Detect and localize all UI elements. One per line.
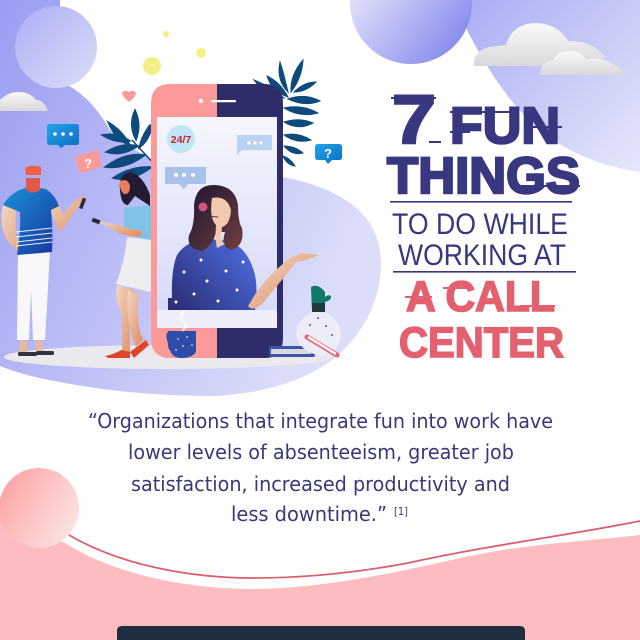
cloud: left bbox=[0, 92, 48, 111]
chat bubble: blue question: ? bbox=[324, 146, 332, 161]
wave line bbox=[69, 521, 640, 578]
desk on screen bbox=[157, 310, 277, 328]
title: to do while: TO DO WHILE bbox=[392, 208, 568, 241]
man bbox=[1, 166, 86, 356]
chat bubble: blue bbox=[47, 124, 79, 148]
woman: legs bbox=[116, 285, 135, 352]
plant: right leaves bbox=[254, 60, 320, 166]
decorative dots bbox=[143, 31, 206, 75]
chat bubble: screen right bbox=[237, 135, 272, 155]
man: neck and beard bbox=[26, 178, 40, 192]
ground shadow bbox=[4, 345, 332, 369]
title: pink glitch marks bbox=[405, 288, 555, 306]
woman: top bbox=[124, 205, 151, 240]
title: a call: A CALL bbox=[406, 273, 555, 321]
circle: top centre bbox=[350, 0, 472, 64]
quote: [1] bbox=[394, 505, 408, 518]
woman: face bbox=[120, 180, 130, 194]
man: shirt bbox=[3, 187, 59, 255]
title: 7 FUN: 7 bbox=[392, 81, 436, 158]
chat bubble: pink question bbox=[75, 150, 102, 172]
woman: hair bbox=[120, 172, 150, 206]
agent: headset bbox=[198, 202, 218, 217]
chat bubble: screen left bbox=[165, 167, 206, 189]
circle: top left bbox=[15, 6, 97, 88]
title: 7 FUN: FUN bbox=[450, 97, 560, 154]
title: rule 1 bbox=[390, 201, 572, 203]
title: rule 2 bbox=[393, 271, 576, 273]
badge: 24/7 bbox=[167, 125, 195, 153]
badge: 24/7: 24/7 bbox=[171, 134, 191, 146]
woman: arm bbox=[95, 221, 143, 236]
phone: screen bbox=[157, 117, 277, 328]
title: working at: WORKING AT bbox=[398, 239, 566, 272]
pink wave bottom bbox=[0, 516, 640, 640]
title: 7 FUN bbox=[392, 81, 560, 158]
cloud: front bbox=[540, 51, 625, 75]
agent: sweater bbox=[168, 239, 256, 310]
books and cactus vase bbox=[269, 286, 341, 357]
chat bubble: blue question bbox=[315, 144, 342, 164]
cloud: back bbox=[474, 23, 606, 66]
icon: heart bbox=[122, 91, 136, 102]
agent: hair bbox=[189, 185, 243, 251]
quote: less downtime.” bbox=[231, 502, 387, 526]
cloud: top right bbox=[474, 23, 625, 75]
quote: “Organizations that integrate fun into work have bbox=[88, 409, 553, 433]
quote: satisfaction, increased productivity and bbox=[131, 472, 510, 496]
title: glitch marks bbox=[387, 98, 580, 186]
background: lavender top-left wave bbox=[0, 0, 381, 396]
agent: sweater dots bbox=[174, 258, 244, 304]
circle: bottom left pink bbox=[0, 468, 79, 548]
agent woman bbox=[168, 185, 318, 310]
man: feet bbox=[18, 341, 54, 356]
man: shirt stripes bbox=[16, 228, 52, 246]
man: hair bbox=[25, 166, 41, 175]
dark panel bottom bbox=[117, 626, 525, 640]
woman: skirt bbox=[116, 237, 151, 292]
phone: pink half bbox=[151, 84, 217, 358]
chat bubble: pink question: ? bbox=[84, 156, 92, 171]
phone bbox=[151, 84, 283, 358]
man: phone bbox=[79, 198, 86, 209]
man: trousers bbox=[17, 249, 50, 340]
title bbox=[387, 81, 580, 367]
agent: face bbox=[211, 198, 231, 248]
title: THINGS: THINGS bbox=[387, 147, 580, 204]
phone: navy half bbox=[217, 84, 283, 358]
background: lavender top-right shape bbox=[465, 0, 640, 172]
woman: phone bbox=[92, 218, 100, 224]
woman bbox=[92, 172, 151, 358]
phone: speaker bbox=[199, 99, 236, 103]
woman: shoes bbox=[105, 340, 149, 358]
quote bbox=[88, 409, 553, 526]
quote: lower levels of absenteeism, greater job bbox=[128, 440, 514, 464]
title: center: CENTER bbox=[399, 319, 564, 367]
agent: arm bbox=[248, 253, 318, 309]
man: arms bbox=[1, 205, 36, 268]
plant: left leaves bbox=[102, 110, 155, 179]
coffee mug bbox=[167, 311, 196, 358]
